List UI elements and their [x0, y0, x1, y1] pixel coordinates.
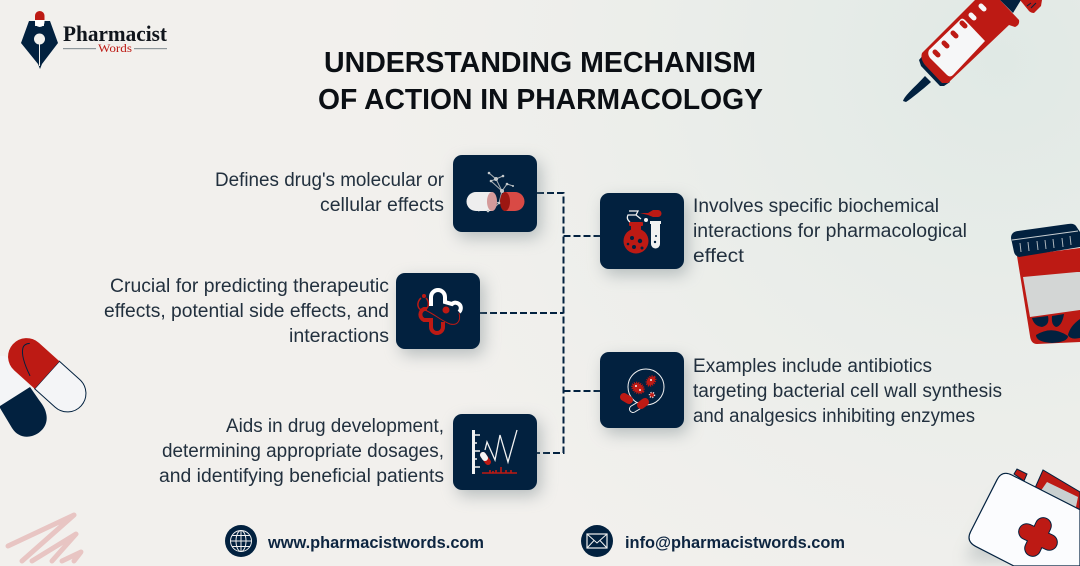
- panel: molecular effects: [215, 155, 541, 238]
- text: drug examples: Examples include antibiotics: [693, 356, 932, 377]
- footer: email: [581, 525, 845, 557]
- logo: Pharmacist Words: [21, 11, 168, 69]
- decorative scribble: [8, 515, 81, 561]
- title: OF ACTION IN PHARMACOLOGY: [318, 84, 763, 116]
- text: biochemical interactions: interactions for pharmacological: [693, 221, 967, 242]
- text: predicting effects: effects, potential side effects, and: [104, 301, 389, 322]
- icon: red cross: [1011, 510, 1065, 564]
- text: drug development: determining appropriate dosages,: [162, 441, 444, 462]
- icon: medicine bottle: [1011, 224, 1080, 344]
- text: drug development: Aids in drug development,: [226, 416, 444, 437]
- icon: bacteria and capsules: [624, 369, 664, 409]
- icon: globe: [225, 525, 257, 557]
- icon: pen nib with capsule: [21, 11, 58, 69]
- text: drug examples: and analgesics inhibiting enzymes: [693, 406, 975, 427]
- panel: biochemical interactions: [600, 193, 967, 275]
- icon: envelope: [581, 525, 613, 557]
- icon: split capsule with molecule: [466, 172, 524, 212]
- logo subtitle: Words: [98, 43, 133, 55]
- icon: first aid kit: [965, 469, 1080, 566]
- footer: website: [225, 525, 484, 557]
- text: predicting effects: interactions: [289, 326, 389, 347]
- text: molecular effects: [215, 170, 445, 216]
- icon: medical cross with stethoscope: [418, 290, 461, 333]
- text: biochemical interactions: Involves specific biochemical: [693, 196, 939, 217]
- icon: capsules: [0, 330, 94, 437]
- text: drug development: and identifying beneficial patients: [159, 466, 444, 487]
- text: molecular effects: Defines drug's molecular or: [215, 170, 445, 191]
- dashed connector lines: [480, 193, 600, 453]
- text: drug examples: targeting bacterial cell wall synthesis: [693, 381, 1002, 402]
- text: biochemical interactions: [693, 196, 967, 267]
- text: drug development: [159, 416, 444, 487]
- text: predicting effects: Crucial for predicting therapeutic: [110, 276, 389, 297]
- icon: syringe: [903, 0, 1042, 102]
- text: molecular effects: cellular effects: [320, 195, 444, 216]
- title: [318, 47, 763, 116]
- text: website: www.pharmacistwords.com: [267, 533, 484, 552]
- text: predicting effects: [104, 276, 389, 347]
- text: email: info@pharmacistwords.com: [625, 533, 845, 552]
- panel: predicting effects: [104, 273, 484, 355]
- icon: flask and test tube: [624, 210, 662, 254]
- panel: drug development: [159, 414, 541, 496]
- title: UNDERSTANDING MECHANISM: [324, 47, 756, 79]
- text: biochemical interactions: effect: [693, 246, 745, 267]
- icon: dosage chart with capsule: [473, 430, 517, 474]
- logo wordmark: Pharmacist: [63, 21, 168, 46]
- panel: drug examples: [600, 352, 1002, 434]
- text: drug examples: [693, 356, 1002, 427]
